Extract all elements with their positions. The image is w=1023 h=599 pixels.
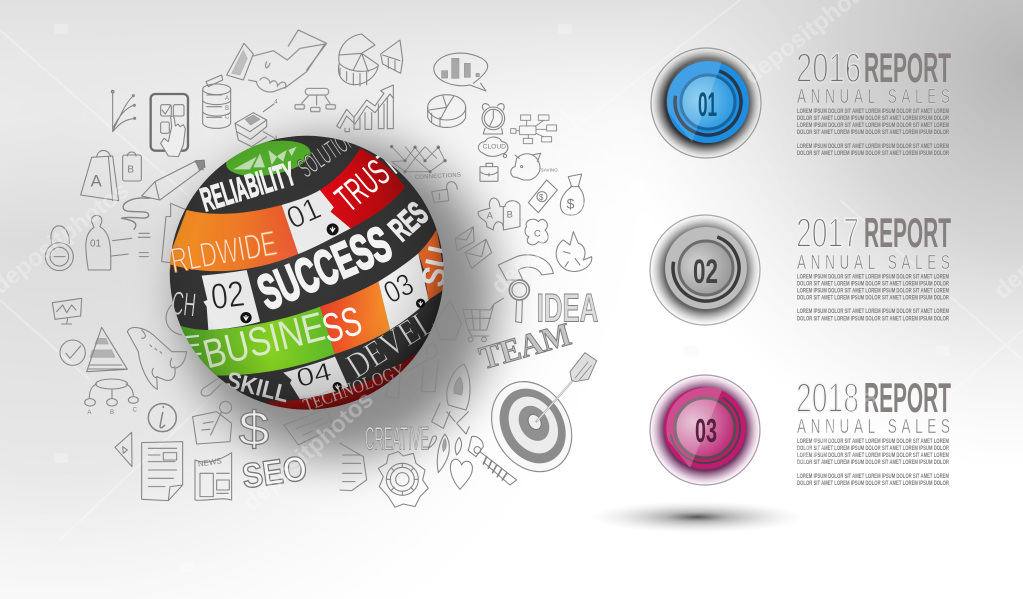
icon: credit card <box>284 409 335 445</box>
text block 2016 <box>796 44 951 157</box>
label: SKILL: SKILL <box>224 367 292 408</box>
icon: puzzle pieces <box>478 198 548 245</box>
icon: hierarchy: B <box>110 410 114 416</box>
label: RESEARCH: RES <box>382 195 435 249</box>
body copy: DOLOR SIT AMET LOREM IPSUM DOLOR SIT AMET LOREM IPSUM DOLOR <box>797 294 949 302</box>
icon: handshake <box>227 30 327 92</box>
orange right block <box>418 229 447 300</box>
icon: bottle <box>86 215 150 270</box>
icon: check circle <box>60 340 85 365</box>
body copy <box>797 108 949 157</box>
year 2016: 2016 <box>796 44 861 91</box>
watermarks: depositphotos <box>486 169 627 299</box>
body copy: LOREM IPSUM DOLOR SIT AMET LOREM IPSUM DOLOR SIT AMET LOREM <box>797 108 949 115</box>
label: 01: 01 <box>282 191 326 236</box>
icon: pinned note <box>193 401 232 444</box>
icon: cloud: CLOUD <box>483 144 506 151</box>
number 03: 03 <box>695 412 717 449</box>
green cap <box>226 140 310 176</box>
icon: money bag: $ <box>567 195 575 211</box>
icon: network <box>511 115 557 144</box>
body copy: LOREM IPSUM DOLOR SIT AMET LOREM IPSUM DOLOR SIT AMET LOREM <box>797 308 949 315</box>
subheading: ANNUAL SALES <box>797 251 950 274</box>
icon: shopping bag <box>81 150 119 201</box>
icon: small bag: B <box>127 165 134 176</box>
label: 04: 04 <box>294 357 334 393</box>
text block 2018 <box>796 374 951 487</box>
watermarks: depositphotos <box>741 384 882 514</box>
button 01 <box>651 48 761 158</box>
label: CH: CH <box>170 285 198 324</box>
dark red band <box>266 352 416 410</box>
arrow dot 02 <box>240 312 252 323</box>
icon: notepad <box>340 443 367 491</box>
icon: book pile <box>235 99 278 147</box>
icon: heart <box>450 459 472 489</box>
icon: pencil with squiggle <box>122 160 205 229</box>
year 2017: 2017 <box>796 209 859 256</box>
body copy: DOLOR SIT AMET LOREM IPSUM DOLOR SIT AMET LOREM IPSUM DOLOR <box>797 115 949 122</box>
icon: triangle <box>115 432 132 467</box>
arrow dot 03 <box>416 299 425 308</box>
subheading: ANNUAL SALES <box>797 415 950 438</box>
body copy: LOREM IPSUM DOLOR SIT AMET LOREM IPSUM DOLOR SIT AMET LOREM <box>797 288 949 294</box>
icon: growth curves <box>111 90 136 132</box>
label: WORLDWIDE: WORLDWIDE <box>128 224 280 288</box>
label: BUSINESS green part: BUSINE <box>198 303 329 377</box>
sphere: RELIABILITY <box>197 156 300 219</box>
body copy: DOLOR SIT AMET LOREM IPSUM DOLOR SIT AMET LOREM IPSUM DOLOR <box>797 129 949 136</box>
doodles: lower right icons: CREATIVE <box>365 420 429 456</box>
body copy: LOREM IPSUM DOLOR SIT AMET LOREM IPSUM DOLOR SIT AMET LOREM <box>797 473 949 480</box>
body copy <box>797 438 949 487</box>
body copy: LOREM IPSUM DOLOR SIT AMET LOREM IPSUM DOLOR SIT AMET LOREM <box>797 438 949 445</box>
body copy: DOLOR SIT AMET LOREM IPSUM DOLOR SIT AMET LOREM IPSUM DOLOR <box>797 459 949 466</box>
white block 03 <box>378 253 429 330</box>
body copy: DOLOR SIT AMET LOREM IPSUM DOLOR SIT AMET LOREM IPSUM DOLOR <box>797 280 949 288</box>
icon: database stack: C <box>225 114 230 120</box>
icon: puzzle pieces: C <box>534 229 541 239</box>
icon: book pile: 4 <box>274 136 278 142</box>
icon: bottle: 01 <box>90 239 102 250</box>
label: TRUST: TRUST <box>327 143 407 220</box>
label: 02: 02 <box>209 272 247 317</box>
icon: chart board <box>52 298 82 324</box>
icon: floppy disk <box>435 301 462 340</box>
number 02: 02 <box>693 253 718 291</box>
icon: open lock <box>432 182 457 203</box>
ground shadow <box>589 501 805 533</box>
icon: IDEA lettering: IDEA <box>537 286 598 330</box>
icon: database stack: A <box>225 96 229 102</box>
orange block SS <box>320 282 390 354</box>
white block 02 <box>202 270 260 330</box>
icon: newspaper: NEWS <box>197 456 222 469</box>
subheading: ANNUAL SALES <box>797 85 950 108</box>
arrow dot 04 <box>333 382 342 391</box>
body copy: LOREM IPSUM DOLOR SIT AMET LOREM IPSUM DOLOR SIT AMET LOREM <box>797 122 949 129</box>
body copy: DOLOR SIT AMET LOREM IPSUM DOLOR SIT AMET LOREM IPSUM DOLOR <box>797 445 949 452</box>
button 03 <box>650 375 760 485</box>
icon: shopping cart <box>463 298 503 342</box>
icon: document behind sphere <box>162 203 187 263</box>
icon: banknote: $ <box>539 193 544 202</box>
icon: connections network <box>390 145 446 173</box>
icon: pyramid <box>87 327 127 372</box>
icon: speech bubble chart <box>434 53 488 91</box>
sphere <box>170 136 444 410</box>
number 01: 01 <box>698 86 717 124</box>
label: saving: SAVING <box>541 167 558 172</box>
icon: necktie <box>468 436 517 485</box>
body copy: DOLOR SIT AMET LOREM IPSUM DOLOR SIT AMET LOREM IPSUM DOLOR <box>797 480 949 487</box>
body copy: LOREM IPSUM DOLOR SIT AMET LOREM IPSUM DOLOR SIT AMET LOREM <box>797 143 949 150</box>
sphere shadow <box>140 103 530 493</box>
icon: padlock <box>45 226 73 271</box>
orange band <box>167 205 298 271</box>
icon: paper clip <box>201 378 222 396</box>
icon: target with arrow <box>476 353 597 486</box>
white block 04 <box>283 357 348 399</box>
icon: hierarchy <box>85 379 138 416</box>
icon: flow chart <box>295 88 335 112</box>
green band <box>178 307 335 376</box>
label: SOLUTIONS: SOLUTIONS <box>292 118 367 183</box>
arrow dot 01 <box>327 223 339 235</box>
icon: info circle <box>148 404 176 432</box>
label: 03: 03 <box>378 267 419 310</box>
icon: small bag <box>123 152 141 181</box>
icon: database stack: B <box>225 106 229 112</box>
icon: document <box>142 442 183 501</box>
body copy: DOLOR SIT AMET LOREM IPSUM DOLOR SIT AMET LOREM IPSUM DOLOR <box>797 150 949 157</box>
icon: person <box>385 344 438 398</box>
icon: gear <box>378 452 428 507</box>
icon: pie chart <box>428 95 466 127</box>
body copy: DOLOR SIT AMET LOREM IPSUM DOLOR SIT AMET LOREM IPSUM DOLOR <box>797 316 949 322</box>
icon: magnifier <box>509 280 529 323</box>
icon: envelopes <box>455 227 492 268</box>
year 2018: 2018 <box>796 374 859 421</box>
icon: SEO lettering: SEO <box>240 450 309 496</box>
icon: alarm clock <box>482 104 505 134</box>
icon: money bag <box>560 174 584 215</box>
label: TECHNOLOGY: TECHNOLOGY <box>301 360 408 416</box>
watermarks: depositphotos <box>238 386 379 516</box>
label: SUCCESS: SUCCESS <box>250 216 399 321</box>
icon: puzzle pieces: B <box>507 209 513 219</box>
label: connections: CONNECTIONS <box>415 173 461 181</box>
icon: hierarchy: A <box>87 410 91 416</box>
icon: sphere side circle <box>166 305 182 335</box>
doodles: lower left icons <box>52 298 335 501</box>
text block 2017 <box>796 209 951 322</box>
doodles: upper left icons <box>45 30 335 271</box>
icon: database stack <box>203 75 231 128</box>
white block 01 <box>282 190 351 254</box>
doodles: lower right icons <box>340 280 598 507</box>
icon: banknote <box>528 180 557 213</box>
label: DEVELOPMENT: DEVEL <box>339 301 442 386</box>
icon: puzzle pieces: A <box>487 210 494 220</box>
red band <box>320 148 405 228</box>
icon: curved arrow <box>498 255 553 280</box>
button 02 <box>650 215 760 325</box>
icon: hierarchy: C <box>133 408 138 414</box>
icon: cloud <box>478 137 508 158</box>
doodles: upper right icons <box>337 34 592 280</box>
icon: newspaper <box>195 453 232 500</box>
icon: 3D pie chart <box>338 34 403 86</box>
icon: rocket <box>432 364 470 434</box>
icon: dollar sign: $ <box>239 402 269 456</box>
icon: book pile: 4 <box>274 99 278 105</box>
icon: rocket plane <box>127 328 187 389</box>
icon: piggy bank <box>511 153 541 180</box>
label: BUSINESS orange part: SS <box>317 297 367 352</box>
icon: shopping bag: A <box>91 172 103 191</box>
icon: rising chart <box>337 85 393 132</box>
label: partial left word: E <box>181 329 204 364</box>
body copy: LOREM IPSUM DOLOR SIT AMET LOREM IPSUM DOLOR SIT AMET LOREM <box>797 452 949 459</box>
icon: drops <box>428 434 462 473</box>
icon: circular arrow <box>556 232 592 271</box>
icon: TEAM lettering: TEAM <box>476 317 575 377</box>
label: SU: SU <box>415 243 459 290</box>
body copy <box>797 274 949 322</box>
icon: tablet with hand <box>151 94 188 157</box>
icon: briefcase <box>480 163 498 181</box>
body copy: LOREM IPSUM DOLOR SIT AMET LOREM IPSUM DOLOR SIT AMET LOREM <box>797 274 949 280</box>
